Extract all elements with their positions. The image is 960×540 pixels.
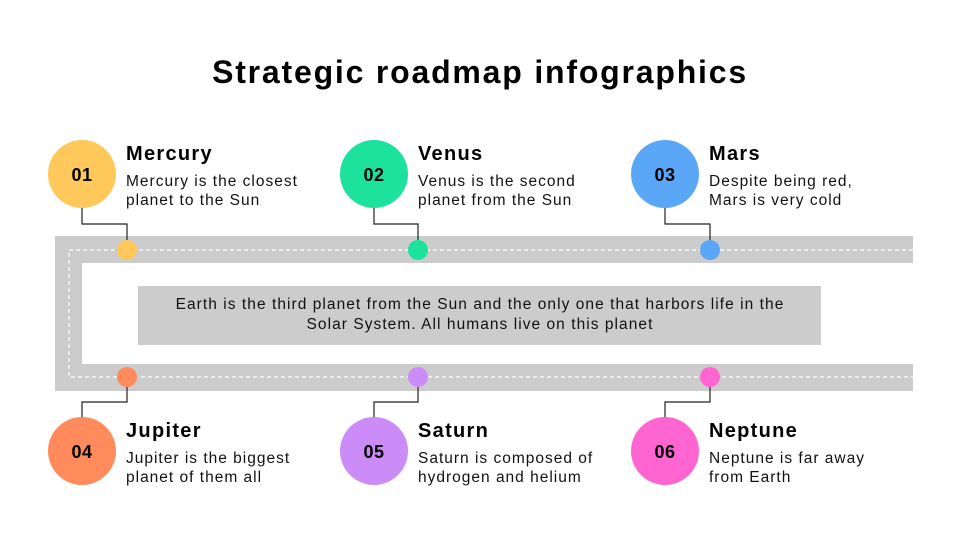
- milestone 02: Venus: planet from the Sun: [418, 192, 572, 209]
- milestone 04: Jupiter: Jupiter: [126, 420, 202, 442]
- milestone 03: Mars: Mars: [709, 143, 761, 165]
- milestone 04: Jupiter: [48, 367, 290, 486]
- milestone 04: Jupiter: 04: [71, 442, 93, 462]
- milestone 04: Jupiter: planet of them all: [126, 469, 262, 486]
- milestone 03: Mars: 03: [654, 165, 676, 185]
- milestone 06: Neptune: from Earth: [709, 469, 791, 486]
- center text box: [138, 286, 821, 345]
- milestone 01: Mercury: planet to the Sun: [126, 192, 260, 209]
- milestone 04: Jupiter: Jupiter is the biggest: [126, 450, 290, 467]
- milestone 03: Mars: Despite being red,: [709, 173, 853, 190]
- title: Strategic roadmap infographics: [212, 54, 748, 90]
- milestone 02: Venus: 02: [363, 165, 385, 185]
- milestone 05: Saturn: hydrogen and helium: [418, 469, 582, 486]
- milestone 02: Venus: [340, 140, 576, 260]
- roadmap track: [55, 236, 913, 391]
- milestone 02: Venus: Venus: [418, 143, 483, 165]
- milestone 01: Mercury: Mercury: [126, 143, 213, 165]
- milestone 06: Neptune: [631, 367, 865, 486]
- center text box: Earth is the third planet from the Sun and the only one that harbors life in the: [176, 296, 784, 313]
- milestone 05: Saturn: Saturn is composed of: [418, 450, 593, 467]
- milestone 05: Saturn: 05: [363, 442, 385, 462]
- milestone 05: Saturn: Saturn: [418, 420, 489, 442]
- milestone 03: Mars: Mars is very cold: [709, 192, 842, 209]
- milestone 06: Neptune: 06: [654, 442, 676, 462]
- milestone 01: Mercury: Mercury is the closest: [126, 173, 298, 190]
- milestone 06: Neptune: Neptune is far away: [709, 450, 865, 467]
- milestone 03: Mars: [631, 140, 853, 260]
- milestone 01: Mercury: 01: [71, 165, 93, 185]
- milestone 05: Saturn: [340, 367, 593, 486]
- center text box: Solar System. All humans live on this planet: [307, 316, 653, 333]
- milestone 02: Venus: Venus is the second: [418, 173, 576, 190]
- milestone 01: Mercury: [48, 140, 298, 260]
- milestone 06: Neptune: Neptune: [709, 420, 798, 442]
